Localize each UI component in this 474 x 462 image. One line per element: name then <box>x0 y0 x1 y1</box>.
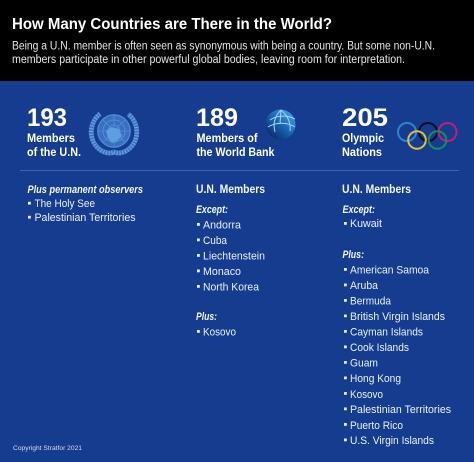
World Bank membership list: Monaco <box>203 266 241 278</box>
stat: 193 members of the U.N. <box>27 104 81 159</box>
observers list: Plus permanent observers <box>28 184 143 196</box>
World Bank membership list: Andorra <box>203 220 242 232</box>
Olympic membership list: Cayman Islands <box>350 326 423 338</box>
Olympic membership list: Plus: <box>342 249 364 261</box>
Olympic membership list: U.N. Members <box>342 184 411 196</box>
World Bank membership list: Liechtenstein <box>203 250 265 262</box>
Olympic membership list: U.S. Virgin Islands <box>350 435 434 447</box>
icon: Olympic rings <box>398 123 456 149</box>
header band <box>0 0 474 81</box>
World Bank membership list: Cuba <box>203 235 228 247</box>
World Bank membership list: U.N. Members <box>196 184 265 196</box>
World Bank membership list: North Korea <box>203 282 260 294</box>
Olympic membership list: Kuwait <box>350 218 383 230</box>
World Bank membership list: Kosovo <box>203 326 236 338</box>
observers list: Palestinian Territories <box>34 212 136 224</box>
Olympic membership list: Bermuda <box>350 296 392 308</box>
World Bank membership list: Plus: <box>196 311 217 323</box>
copyright: Copyright Stratfor 2021 <box>13 445 82 452</box>
icon: United Nations emblem <box>91 114 137 153</box>
title: How Many Countries are There in the World? <box>12 16 332 33</box>
Olympic membership list: British Virgin Islands <box>350 311 445 323</box>
Olympic membership list: Puerto Rico <box>350 420 403 432</box>
Olympic membership list <box>342 184 451 447</box>
World Bank membership list <box>196 184 265 338</box>
stat: 193 members of the U.N.: Members <box>27 133 75 145</box>
Olympic membership list: Aruba <box>350 280 379 292</box>
stat: 205 Olympic nations <box>342 104 388 159</box>
intro text <box>12 40 435 66</box>
stat: 189 members of the World Bank <box>196 104 275 159</box>
icon: World Bank globe <box>266 110 296 140</box>
stat: 193 members of the U.N.: of the U.N. <box>27 147 81 159</box>
Olympic membership list: Except: <box>342 204 375 216</box>
Olympic membership list: Palestinian Territories <box>350 404 451 416</box>
stat: 189 members of the World Bank: 189 <box>196 104 238 132</box>
column: World Bank <box>196 104 296 338</box>
Olympic membership list: Hong Kong <box>350 373 401 385</box>
observers list <box>28 184 143 224</box>
column: Olympics <box>342 104 456 447</box>
Olympic membership list: Kosovo <box>350 389 383 401</box>
stat: 189 members of the World Bank: the World Bank <box>196 147 275 159</box>
Olympic membership list: American Samoa <box>350 264 430 276</box>
World Bank membership list: Except: <box>196 204 228 216</box>
stat: 193 members of the U.N.: 193 <box>27 104 67 132</box>
observers list: The Holy See <box>34 198 95 210</box>
Olympic membership list: Cook Islands <box>350 342 409 354</box>
Olympic membership list: Guam <box>350 358 378 370</box>
stat: 189 members of the World Bank: Members of <box>196 133 258 145</box>
stat: 205 Olympic nations: 205 <box>342 104 388 132</box>
stat: 205 Olympic nations: Olympic <box>342 133 385 145</box>
stat: 205 Olympic nations: Nations <box>342 147 382 159</box>
column: United Nations <box>27 104 143 224</box>
intro text: Being a U.N. member is often seen as synonymous with being a country. But some non-U.N. <box>12 40 435 52</box>
intro text: members participate in other powerful global bodies, leaving room for interpretation. <box>12 54 405 66</box>
